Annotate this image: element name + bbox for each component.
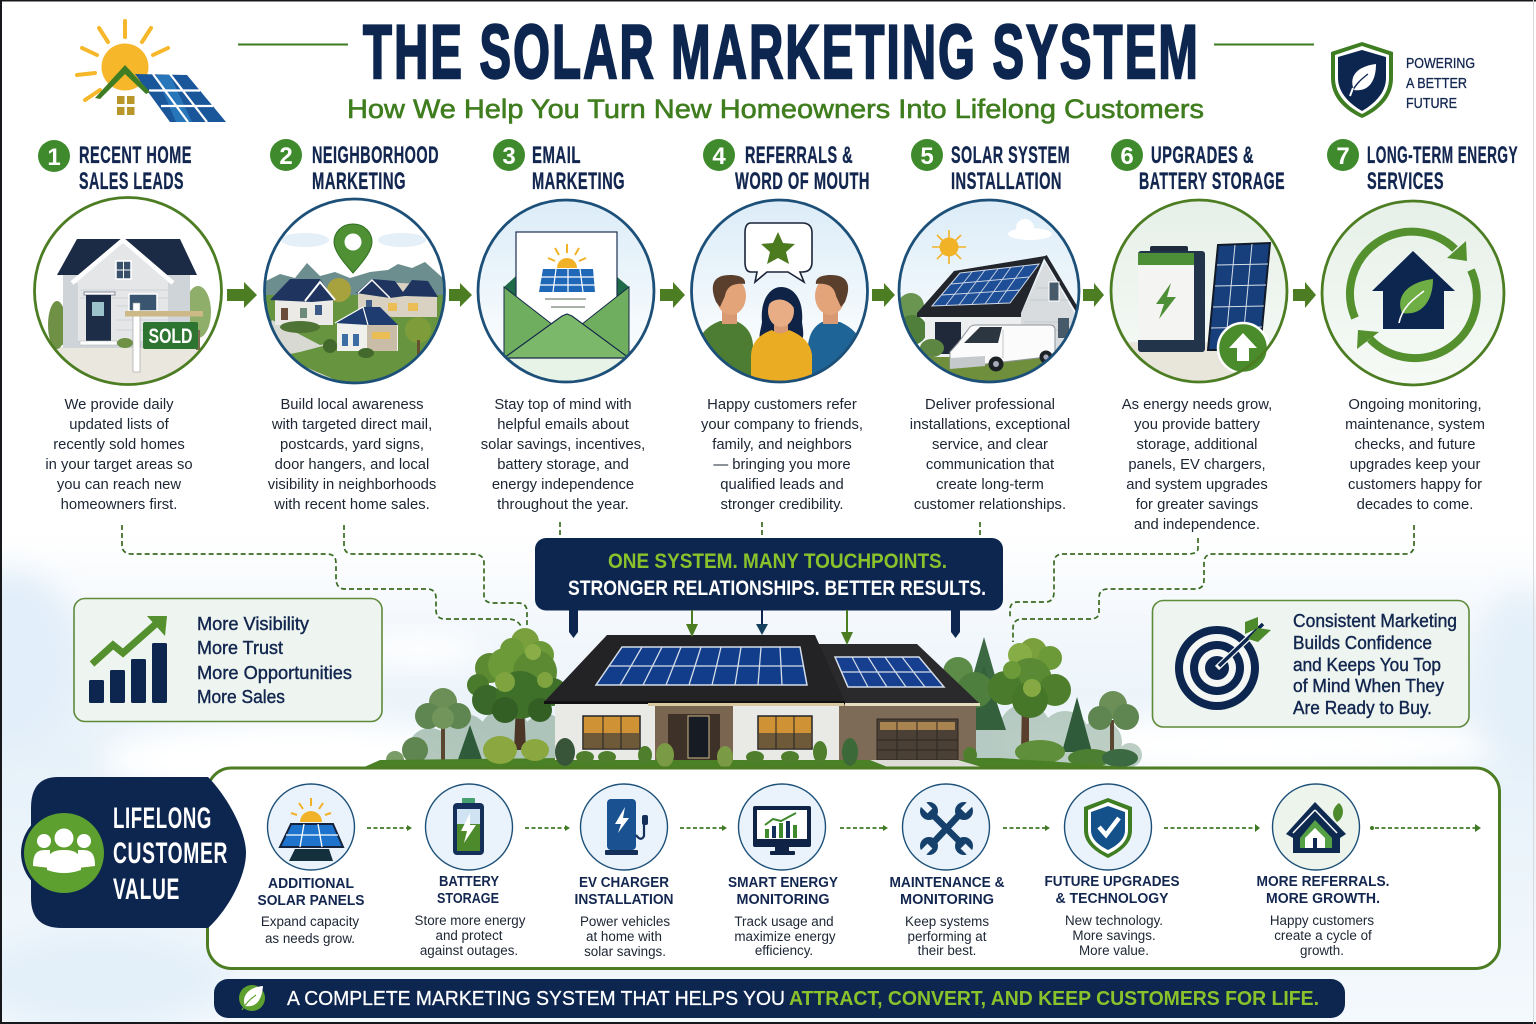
step 7 text: upgrades keep your (1350, 457, 1480, 473)
badge text: A BETTER (1406, 76, 1467, 92)
step 7 heading: 7 (1336, 143, 1350, 170)
badge: lifelong customer value: CUSTOMER (113, 837, 228, 870)
arrow 5 to 6 (1083, 283, 1104, 307)
arrow 4 to 5 (872, 283, 895, 307)
dashed arrow (1164, 824, 1260, 832)
subtitle: How We Help You Turn New Homeowners Into Lifelong Customers (347, 94, 1204, 124)
step 2 heading: 2 (279, 143, 293, 170)
value item 3 ev charger: at home with (586, 929, 662, 944)
illustration 1: sold house (30, 198, 230, 392)
step 1 text: homeowners first. (61, 497, 177, 513)
banner: one system: STRONGER RELATIONSHIPS. BETTER RESULTS. (568, 576, 986, 600)
value item 3 ev charger: solar savings. (584, 944, 666, 959)
callout: consistent marketing: Builds Confidence (1293, 633, 1432, 653)
step 1 text: you can reach new (57, 477, 181, 493)
arrow 2 to 3 (449, 283, 472, 307)
value item 6 future upgrades: New technology. (1065, 913, 1163, 928)
step 6 text: panels, EV chargers, (1128, 457, 1266, 473)
dashed arrow (525, 825, 570, 831)
step 6 heading: 6 (1120, 143, 1134, 170)
dashed connectors (122, 522, 1414, 642)
step 5 heading: 5 (920, 143, 934, 170)
value item 2 battery storage: BATTERY (439, 874, 499, 890)
step 6 heading: UPGRADES & (1151, 142, 1254, 169)
house walls (555, 702, 976, 760)
arrow 3 to 4 (660, 282, 685, 308)
shield badge (1331, 42, 1393, 118)
value item 6 future upgrades: More savings. (1072, 928, 1156, 943)
illustration 4: referrals people (692, 200, 868, 386)
badge: lifelong customer value: VALUE (113, 873, 180, 906)
callout: consistent marketing (1152, 600, 1469, 727)
value item 3 ev charger: EV CHARGER (579, 875, 669, 891)
step 5 heading: INSTALLATION (951, 168, 1062, 195)
ground lawn (362, 758, 1140, 768)
step 3 heading: EMAIL (532, 142, 581, 169)
step 4 heading: WORD OF MOUTH (735, 168, 870, 195)
step 1 heading (38, 140, 192, 195)
value item 1 additional solar panels: as needs grow. (265, 931, 355, 946)
dashed arrow (1003, 825, 1050, 831)
callout: consistent marketing: and Keeps You Top (1293, 655, 1441, 675)
callout: consistent marketing: Consistent Marketing (1293, 611, 1457, 631)
value item 6 future upgrades: & TECHNOLOGY (1056, 891, 1169, 907)
step 3 text: battery storage, and (497, 457, 629, 473)
step 5 text: customer relationships. (914, 497, 1066, 513)
banner arrows (569, 610, 960, 645)
step 3 text: energy independence (492, 477, 634, 493)
step 2 text: visibility in neighborhoods (268, 477, 436, 493)
big left tree (467, 628, 567, 750)
badge text: FUTURE (1406, 96, 1457, 112)
illustration 7: recycling home (1322, 201, 1504, 385)
step 4 heading: REFERRALS & (745, 142, 853, 169)
illustration 5: installation house and van (895, 200, 1085, 390)
value item 2 battery storage: Store more energy (415, 913, 526, 928)
step 3 text: throughout the year. (497, 497, 629, 513)
step 6 heading: BATTERY STORAGE (1139, 168, 1285, 195)
step 1 text: We provide daily (64, 397, 174, 413)
value item 7 more referrals: Happy customers (1270, 913, 1374, 928)
step 7 text: Ongoing monitoring, (1348, 397, 1482, 413)
step 3 text: helpful emails about (497, 417, 629, 433)
callout: more visibility (74, 598, 382, 722)
step 4 text: family, and neighbors (712, 437, 852, 453)
step 6 text: for greater savings (1136, 497, 1258, 513)
value item 5 maintenance: MONITORING (900, 892, 994, 908)
value item 5 maintenance: MAINTENANCE & (890, 875, 1005, 891)
step 2 text: door hangers, and local (275, 457, 429, 473)
step 4 heading (703, 139, 870, 195)
value item 4 smart monitoring: efficiency. (755, 943, 813, 958)
dashed arrow (840, 825, 888, 831)
step 5 text: installations, exceptional (910, 417, 1070, 433)
step 7 text: maintenance, system (1345, 417, 1485, 433)
target icon (1175, 617, 1271, 710)
step 2 text: with recent home sales. (273, 497, 430, 513)
step 6 text: you provide battery (1134, 417, 1261, 433)
step 5 text: service, and clear (932, 437, 1048, 453)
callout: more visibility: More Visibility (197, 614, 309, 634)
value item 5 maintenance: performing at (908, 929, 987, 944)
value item 7 more referrals: MORE GROWTH. (1266, 891, 1380, 907)
value item 7 more referrals: growth. (1300, 943, 1344, 958)
step 5 heading: SOLAR SYSTEM (951, 142, 1070, 169)
value item 4 smart monitoring: SMART ENERGY (728, 875, 838, 891)
value item 5 maintenance: their best. (918, 943, 976, 958)
arrow 1 to 2 (227, 282, 257, 308)
step 4 text: — bringing you more (713, 457, 851, 473)
step 3 heading: MARKETING (532, 168, 625, 195)
shrubs (483, 736, 977, 768)
title rule left (238, 44, 348, 46)
step 5 heading (911, 139, 1070, 195)
illustration 3: email envelope (477, 200, 655, 388)
value item 7 more referrals: MORE REFERRALS. (1256, 874, 1390, 890)
value item 3 ev charger: INSTALLATION (574, 892, 674, 908)
step 3 text: Stay top of mind with (494, 397, 632, 413)
step 4 text: qualified leads and (720, 477, 844, 493)
callout: more visibility: More Opportunities (197, 663, 352, 683)
callout: consistent marketing: Are Ready to Buy. (1293, 698, 1432, 718)
callout: more visibility: More Sales (197, 687, 285, 707)
step 5 text: Deliver professional (925, 397, 1055, 413)
value item 4 smart monitoring (728, 784, 838, 958)
arrow 6 to 7 (1293, 282, 1316, 308)
step 2 heading: MARKETING (312, 168, 406, 195)
value item 2 battery storage: STORAGE (437, 891, 499, 907)
callout: consistent marketing: of Mind When They (1293, 676, 1444, 696)
step 4 text: Happy customers refer (707, 397, 857, 413)
value item 7 more referrals (1256, 784, 1390, 958)
badge: lifelong customer value: LIFELONG (113, 802, 212, 835)
step 6 text: and independence. (1134, 517, 1260, 533)
step 7 text: decades to come. (1357, 497, 1473, 513)
value item 6 future upgrades (1044, 784, 1180, 958)
right trees (988, 638, 1139, 767)
step 2 text: with targeted direct mail, (271, 417, 432, 433)
value item 6 future upgrades: FUTURE UPGRADES (1044, 874, 1180, 890)
value item 4 smart monitoring: maximize energy (734, 929, 836, 944)
footer banner: ATTRACT, CONVERT, AND KEEP CUSTOMERS FOR LIFE. (789, 988, 1319, 1010)
house scene with trees (362, 628, 1142, 772)
step 6 text: storage, additional (1137, 437, 1257, 453)
step 1 text: in your target areas so (45, 457, 193, 473)
small left tree (386, 688, 485, 769)
step 3 heading (493, 139, 625, 195)
value item 4 smart monitoring: MONITORING (736, 892, 830, 908)
step 2 heading: NEIGHBORHOOD (312, 142, 439, 169)
value item 5 maintenance: Keep systems (905, 914, 989, 929)
step 2 heading (270, 139, 439, 195)
step 1 heading: SALES LEADS (79, 168, 184, 195)
dashed arrow (367, 825, 412, 831)
step 7 text: checks, and future (1355, 437, 1475, 453)
step 2 text: Build local awareness (280, 397, 424, 413)
value item 2 battery storage: and protect (436, 928, 503, 943)
icon: customers (33, 828, 95, 873)
step 6 text: and system upgrades (1126, 477, 1268, 493)
dashed arrow (680, 825, 727, 831)
dashed arrow (1370, 824, 1481, 832)
step 7 heading (1327, 139, 1518, 195)
step 1 heading: RECENT HOME (79, 142, 192, 169)
value item 4 smart monitoring: Track usage and (734, 914, 834, 929)
step 1 heading: 1 (47, 144, 61, 171)
callout: more visibility: More Trust (197, 638, 283, 658)
logo: sun over solar roof (77, 21, 226, 122)
step 4 text: your company to friends, (701, 417, 863, 433)
value item 2 battery storage (415, 784, 526, 958)
value item 1 additional solar panels: SOLAR PANELS (258, 893, 365, 909)
bar chart icon (89, 616, 167, 703)
value item 1 additional solar panels (258, 784, 365, 946)
step 4 text: stronger credibility. (720, 497, 844, 513)
driveway (870, 760, 985, 768)
house roofs (544, 635, 980, 706)
badge: lifelong customer value (21, 777, 246, 928)
value item 7 more referrals: create a cycle of (1274, 928, 1372, 943)
step 5 text: communication that (926, 457, 1054, 473)
value item 1 additional solar panels: ADDITIONAL (268, 876, 354, 892)
step 6 heading (1111, 139, 1285, 195)
value item 3 ev charger: Power vehicles (580, 914, 670, 929)
footer banner (214, 979, 1345, 1018)
step 4 heading: 4 (712, 143, 726, 170)
banner: one system (535, 538, 1003, 610)
step 1 text: updated lists of (69, 417, 170, 433)
value item 5 maintenance (890, 784, 1005, 958)
title rule right (1214, 44, 1314, 46)
illustration 2: neighborhood map (262, 199, 446, 390)
step 5 text: create long-term (936, 477, 1044, 493)
step 7 text: customers happy for (1348, 477, 1482, 493)
step 1 text: recently sold homes (53, 437, 185, 453)
background trees (408, 637, 1142, 772)
step 6 text: As energy needs grow, (1122, 397, 1272, 413)
step 2 text: postcards, yard signs, (280, 437, 424, 453)
step 3 heading: 3 (502, 143, 516, 170)
badge text (1406, 56, 1475, 112)
banner: one system: ONE SYSTEM. MANY TOUCHPOINTS. (608, 549, 947, 573)
value item 6 future upgrades: More value. (1079, 943, 1149, 958)
value item 1 additional solar panels: Expand capacity (261, 914, 359, 929)
footer banner: A COMPLETE MARKETING SYSTEM THAT HELPS YOU (287, 988, 785, 1010)
value item 2 battery storage: against outages. (420, 943, 518, 958)
value item 3 ev charger (574, 784, 674, 959)
illustration 6: battery and panel (1110, 200, 1290, 387)
step 7 heading: SERVICES (1367, 168, 1444, 195)
solar panels main (596, 647, 944, 687)
badge text: POWERING (1406, 56, 1475, 72)
panel: lifetime value (208, 768, 1500, 968)
illustration 1: sold house: SOLD (148, 325, 192, 348)
step 3 text: solar savings, incentives, (481, 437, 645, 453)
